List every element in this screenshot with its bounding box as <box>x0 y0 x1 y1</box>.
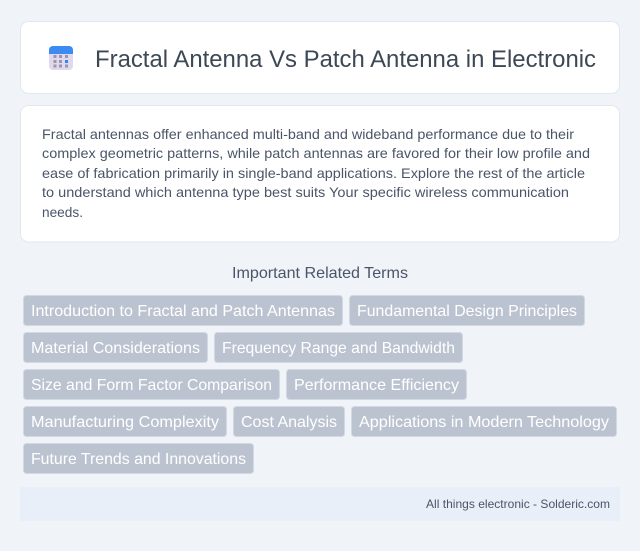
tag: Manufacturing Complexity <box>31 414 219 431</box>
panel: introduction text <box>20 106 620 242</box>
text block: description <box>42 126 590 220</box>
tag <box>24 296 342 326</box>
footer <box>20 487 620 521</box>
panel: related term tags <box>24 296 616 474</box>
tag: Material Considerations <box>31 340 200 357</box>
tag <box>286 370 466 400</box>
tag <box>234 406 344 436</box>
tag: Applications in Modern Technology <box>359 414 609 431</box>
tag <box>24 444 254 474</box>
tag <box>352 406 616 436</box>
tag: Introduction to Fractal and Patch Antennas <box>31 303 335 320</box>
title: Fractal Antenna Vs Patch Antenna in Electronic <box>95 46 596 73</box>
tag <box>350 296 584 326</box>
footer: All things electronic - Solderic.com <box>426 497 610 511</box>
heading: important related terms: Important Related Terms <box>232 265 408 282</box>
icon: calendar <box>49 46 73 70</box>
tag: Performance Efficiency <box>294 377 459 394</box>
tag: Frequency Range and Bandwidth <box>222 340 455 357</box>
tag <box>24 370 280 400</box>
text block: description: complex geometric patterns, while patch antennas are favored for their low profile and <box>42 145 590 161</box>
text block: description: Fractal antennas offer enhanced multi-band and wideband performance due to their <box>42 126 574 142</box>
tag: Cost Analysis <box>241 414 337 431</box>
text block: description: needs. <box>42 204 83 220</box>
tag: Size and Form Factor Comparison <box>31 377 272 394</box>
text block: description: to understand which antenna type best suits Your specific wireless communication <box>42 184 569 200</box>
text block: description: ease of fabrication primarily in single-band applications. Explore the rest of the article <box>42 165 585 181</box>
panel: title header <box>20 22 620 94</box>
tag <box>214 332 462 362</box>
tag <box>24 406 226 436</box>
tag: Future Trends and Innovations <box>31 451 246 468</box>
tag <box>24 332 208 362</box>
tag: Fundamental Design Principles <box>357 303 577 320</box>
